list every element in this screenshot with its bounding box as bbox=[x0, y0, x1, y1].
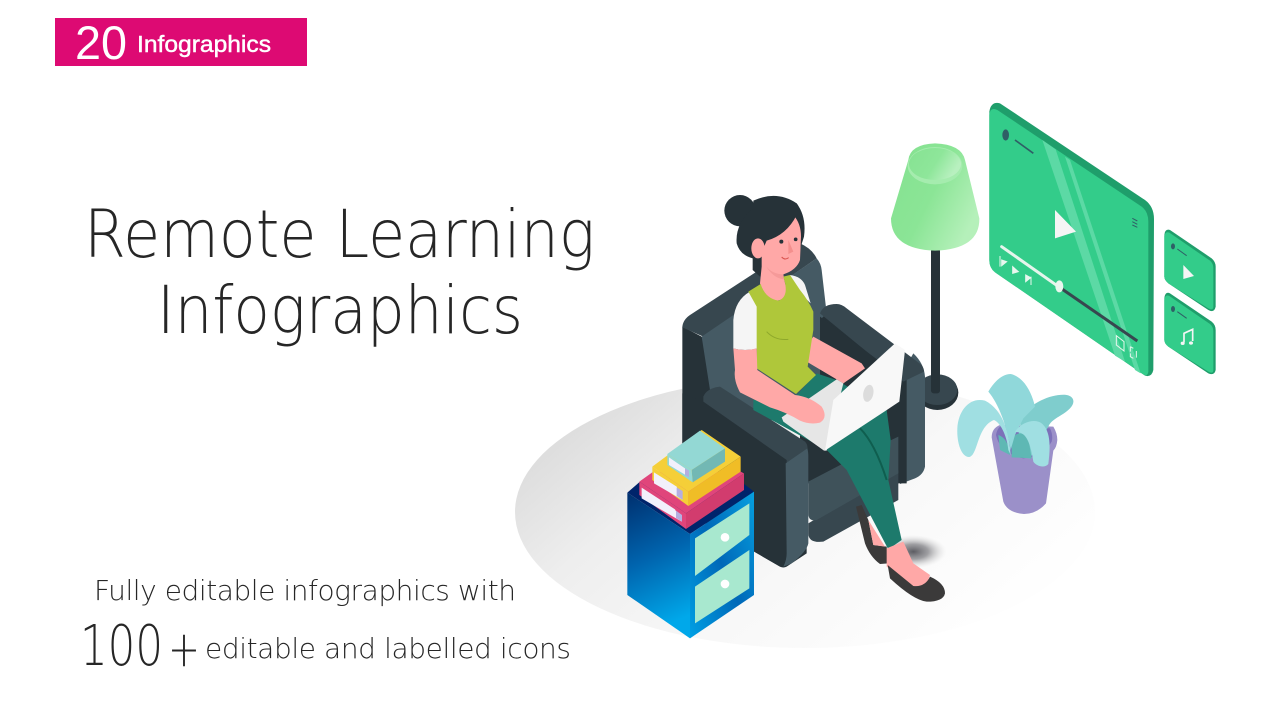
video player screens bbox=[989, 103, 1216, 376]
subtitle text: editable and labelled icons bbox=[205, 632, 571, 665]
hair fringe bbox=[753, 196, 799, 248]
pants bbox=[753, 373, 902, 549]
subtitle text: 100 bbox=[80, 614, 163, 679]
green vest bbox=[748, 275, 816, 394]
cabinet front bbox=[690, 492, 754, 638]
front foot and shoe bbox=[887, 542, 945, 602]
facial features bbox=[779, 237, 797, 259]
near arm bbox=[733, 348, 825, 423]
teal book bbox=[667, 431, 725, 482]
subtitle text: Fully editable infographics with bbox=[94, 574, 516, 607]
lamp base bbox=[916, 374, 958, 410]
laptop bbox=[782, 343, 905, 451]
lamp pole bbox=[931, 248, 940, 393]
filing cabinet bbox=[627, 482, 754, 638]
sleeves bbox=[733, 275, 811, 350]
floor lamp bbox=[891, 143, 979, 410]
subtitle text: + bbox=[168, 620, 200, 678]
chin shadow bbox=[766, 266, 784, 279]
woman bbox=[724, 195, 945, 602]
badge: 20 Infographics: Infographics bbox=[137, 31, 271, 57]
lamp shade bbox=[891, 143, 979, 251]
armchair and person bbox=[682, 195, 947, 602]
subtitle text bbox=[80, 574, 571, 679]
badge: 20 Infographics: 20 bbox=[75, 16, 127, 69]
armchair bbox=[682, 243, 925, 567]
floor ellipse bbox=[515, 376, 1095, 648]
pot bbox=[992, 425, 1057, 514]
title: Infographics bbox=[157, 272, 523, 349]
top drawer bbox=[695, 503, 749, 576]
small video card bbox=[1164, 230, 1216, 311]
foot shadow bbox=[880, 535, 947, 568]
left arm bbox=[703, 387, 808, 463]
small music card bbox=[1164, 293, 1216, 374]
bottom drawer bbox=[695, 550, 749, 623]
hair back and bun bbox=[724, 195, 805, 277]
far arm bbox=[807, 337, 865, 383]
cabinet left side bbox=[627, 493, 690, 638]
ear bbox=[751, 238, 765, 258]
back leg and shoe bbox=[856, 505, 888, 564]
potted plant bbox=[957, 374, 1073, 514]
badge: 20 Infographics bbox=[55, 16, 307, 69]
seat cushions bbox=[808, 470, 898, 542]
neck and face bbox=[760, 215, 801, 301]
yellow book bbox=[652, 430, 741, 506]
pink book bbox=[639, 472, 744, 529]
title bbox=[84, 196, 595, 349]
main video screen bbox=[989, 103, 1154, 376]
stack of books bbox=[639, 430, 744, 529]
title: Remote Learning bbox=[84, 196, 595, 273]
leaves bbox=[957, 374, 1073, 466]
